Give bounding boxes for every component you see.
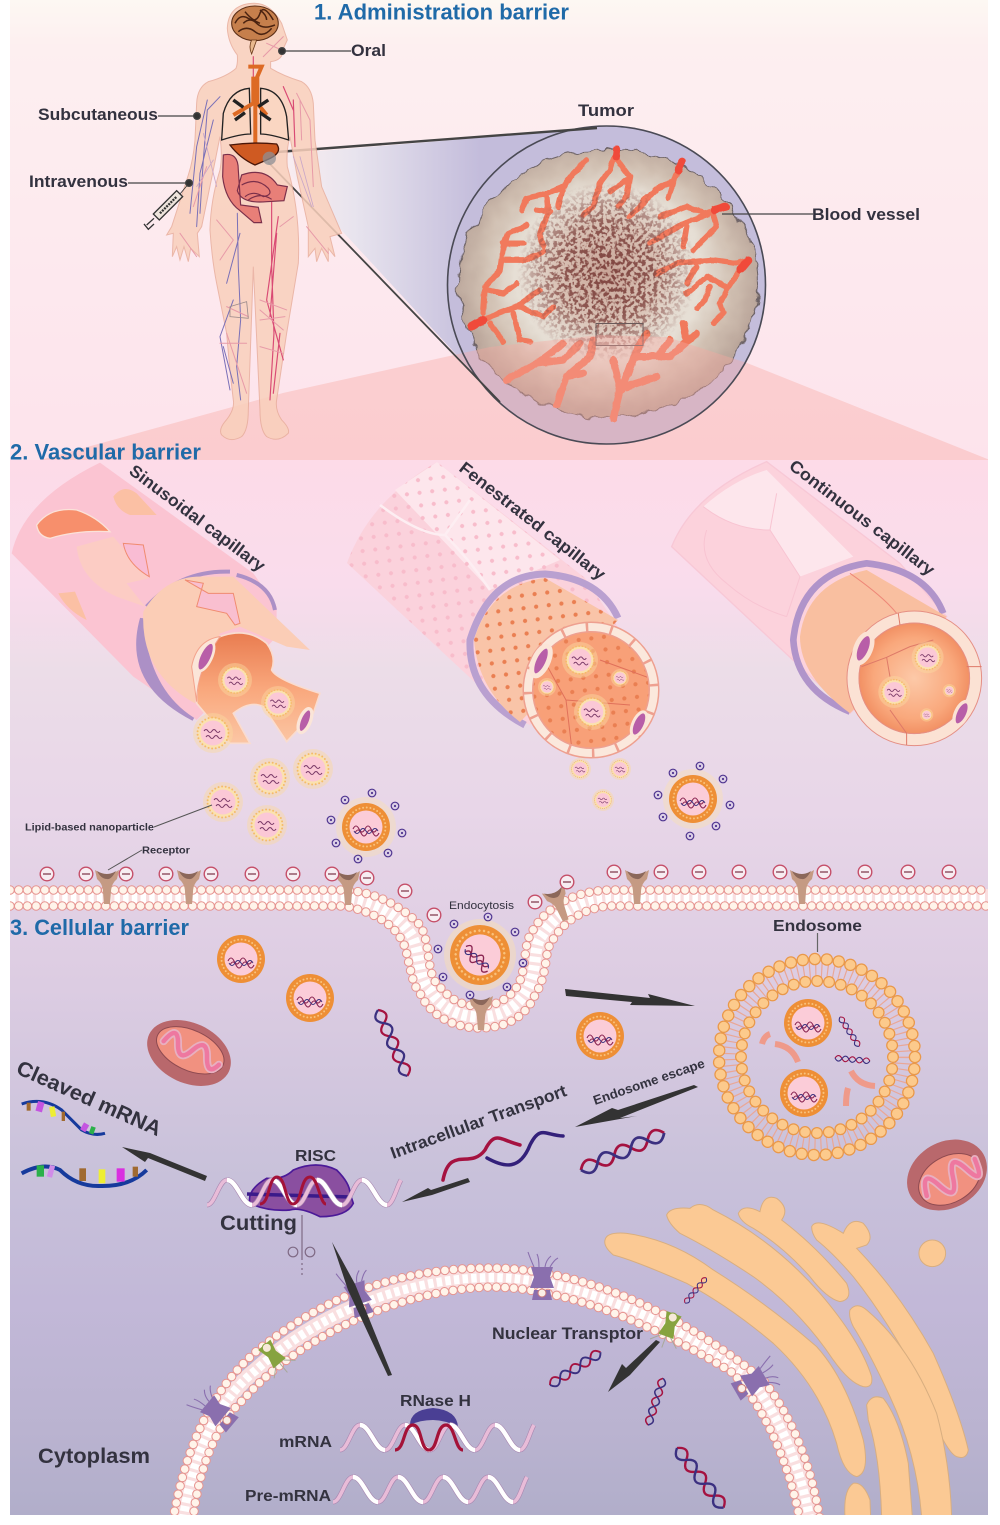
sinusoidal particles bbox=[193, 663, 295, 753]
lumen bbox=[197, 633, 320, 743]
vessels bbox=[180, 37, 328, 400]
mitochondrion right bbox=[894, 1125, 1000, 1225]
label: lipid-based nanoparticle: Lipid-based nanoparticle bbox=[25, 822, 154, 834]
floor plane bbox=[40, 335, 990, 460]
cleaved mRNA top bbox=[22, 1101, 105, 1135]
pale highlight bbox=[395, 462, 560, 590]
siRNA around the nucleus bbox=[547, 1276, 728, 1511]
blood vessel leader bbox=[722, 213, 813, 215]
lipid fragments bbox=[762, 1034, 875, 1106]
nuclei bbox=[851, 631, 876, 665]
pre-mRNA helix bbox=[333, 1477, 527, 1502]
inner wall bbox=[800, 570, 947, 713]
cream cell around nucleus bbox=[192, 637, 220, 702]
endoplasmic reticulum bbox=[605, 1197, 968, 1517]
label: fenestrated capillary: Fenestrated capillary bbox=[456, 458, 610, 584]
endothelial gap bbox=[185, 580, 240, 625]
basement membrane bbox=[793, 563, 943, 712]
label: cleaved mRNA: Cleaved mRNA bbox=[13, 1057, 165, 1141]
title: vascular barrier: 2. Vascular barrier bbox=[10, 440, 201, 464]
mRNA helix bbox=[340, 1425, 534, 1450]
endosome bbox=[719, 959, 915, 1155]
endosome leader bbox=[816, 933, 818, 952]
bronchi bbox=[233, 100, 271, 120]
blood vessel network bbox=[472, 150, 748, 418]
human body anatomy bbox=[144, 3, 342, 440]
nuclear membrane bbox=[173, 1268, 820, 1520]
outer tube bbox=[672, 462, 947, 713]
tumor tissue bbox=[458, 149, 758, 417]
label: mRNA: mRNA bbox=[279, 1434, 332, 1451]
arrow: from nucleus to RISC bbox=[332, 1242, 392, 1376]
basement membrane bbox=[470, 574, 618, 725]
brain stem bbox=[250, 40, 257, 54]
basement membrane bbox=[147, 572, 230, 607]
cytosolic nanoparticles bbox=[217, 935, 624, 1060]
mitochondrion left bbox=[136, 1007, 242, 1099]
title: administration barrier: 1. Administration barrier bbox=[314, 0, 569, 24]
opening rim bbox=[528, 627, 654, 753]
trachea bbox=[233, 67, 267, 143]
fenestra openings bbox=[37, 509, 110, 538]
nuclei bbox=[194, 640, 218, 673]
dsRNA ribbon below escape arrow bbox=[578, 1127, 667, 1176]
outer tube bbox=[12, 463, 277, 720]
receptor leader bbox=[108, 850, 142, 870]
label: continuous capillary: Continuous capillary bbox=[786, 456, 939, 580]
charged nanoparticle right bbox=[654, 762, 734, 840]
inner wall bbox=[474, 578, 618, 722]
sampling box bbox=[596, 324, 643, 346]
label: cutting: Cutting bbox=[220, 1212, 297, 1235]
label: intracellular transport: Intracellular Transport bbox=[388, 1081, 569, 1163]
cell junctions bbox=[862, 613, 982, 745]
intravenous leader bbox=[128, 182, 189, 184]
zoom lens cone bbox=[317, 132, 560, 372]
intestines bbox=[223, 154, 287, 223]
background: vascular and cellular sections bbox=[10, 460, 988, 1515]
speckled core bbox=[517, 182, 697, 362]
RNase H protein bbox=[410, 1408, 458, 1427]
endosome contents bbox=[784, 999, 832, 1047]
dark core strand bbox=[247, 1194, 352, 1197]
label: receptor: Receptor bbox=[142, 844, 190, 856]
circle outline bbox=[448, 126, 766, 444]
oral leader bbox=[282, 50, 351, 52]
vessel rim bbox=[853, 617, 976, 740]
free lipid nanoparticles bbox=[203, 749, 631, 845]
continuous capillary bbox=[672, 462, 982, 746]
syringe bbox=[144, 184, 188, 229]
cell membrane bbox=[10, 890, 988, 1028]
arrow: to RISC bbox=[402, 1178, 470, 1202]
intestinal folds bbox=[242, 182, 272, 200]
endocytosed nanoparticle bbox=[434, 913, 527, 999]
particles in lumen bbox=[912, 641, 944, 673]
label: endocytosis: Endocytosis bbox=[449, 900, 515, 912]
scissors icon bbox=[288, 1215, 315, 1275]
core halo bbox=[533, 198, 680, 340]
tumor magnified circle bbox=[448, 126, 766, 444]
cleaved mRNA bottom bbox=[22, 1165, 147, 1186]
sinusoidal capillary bbox=[12, 463, 320, 743]
RISC complex bbox=[207, 1165, 401, 1217]
label: nuclear transptor: Nuclear Transptor bbox=[492, 1324, 643, 1343]
label: pre-mRNA: Pre-mRNA bbox=[245, 1488, 331, 1505]
label: RNase H: RNase H bbox=[400, 1393, 471, 1410]
label: oral: Oral bbox=[351, 41, 386, 60]
arrow: endosome escape bbox=[575, 1085, 698, 1127]
cell junctions bbox=[545, 660, 655, 750]
label: blood vessel: Blood vessel bbox=[812, 205, 920, 224]
outer tube bbox=[347, 462, 620, 725]
lens line top bbox=[277, 128, 597, 152]
injection dots and leader lines bbox=[128, 48, 813, 214]
hybrid red strand bbox=[395, 1425, 463, 1450]
receptors bbox=[95, 870, 814, 1030]
title: cellular barrier: 3. Cellular barrier bbox=[10, 915, 189, 940]
intracellular ribbon bbox=[443, 1133, 563, 1180]
nanoparticle leader bbox=[154, 805, 212, 827]
highlight bbox=[703, 470, 853, 577]
free siRNA bbox=[373, 1008, 413, 1078]
negative surface charges bbox=[40, 865, 956, 922]
cell boundaries bbox=[380, 500, 490, 590]
label: sinusoidal capillary: Sinusoidal capillary bbox=[126, 461, 269, 576]
RISC protein bbox=[249, 1165, 353, 1217]
label: cytoplasm: Cytoplasm bbox=[38, 1445, 150, 1468]
nuclei bbox=[528, 644, 554, 678]
brain folds bbox=[235, 10, 275, 34]
subcutaneous leader bbox=[158, 115, 197, 117]
fenestrae on tube bbox=[347, 462, 620, 725]
lungs bbox=[222, 88, 289, 140]
arrow: nuclear transport bbox=[608, 1340, 660, 1392]
label: endosome: Endosome bbox=[773, 918, 862, 935]
cell boundaries bbox=[703, 493, 800, 617]
guide strand bbox=[260, 1177, 326, 1204]
target mRNA bbox=[207, 1180, 401, 1205]
lumen bbox=[529, 628, 653, 752]
brain bbox=[232, 6, 278, 41]
label: endosome escape: Endosome escape bbox=[591, 1056, 707, 1108]
label: subcutaneous: Subcutaneous bbox=[38, 105, 158, 124]
charged nanoparticle left bbox=[327, 789, 406, 863]
lens line bottom bbox=[268, 162, 500, 402]
tumor site bbox=[263, 152, 276, 165]
label: intravenous: Intravenous bbox=[29, 172, 128, 191]
background: administration section bbox=[10, 0, 988, 460]
particles in lumen bbox=[562, 642, 598, 678]
label: RISC: RISC bbox=[295, 1148, 336, 1165]
label: tumor: Tumor bbox=[578, 101, 634, 120]
arrow: to cleaved mRNA bbox=[122, 1147, 207, 1181]
fenestrated capillary bbox=[347, 462, 655, 753]
nuclear pores bbox=[187, 1252, 785, 1436]
liver bbox=[230, 143, 279, 165]
body silhouette bbox=[167, 3, 342, 440]
inner wall bbox=[143, 577, 310, 703]
arrow: to endosome bbox=[565, 989, 695, 1006]
